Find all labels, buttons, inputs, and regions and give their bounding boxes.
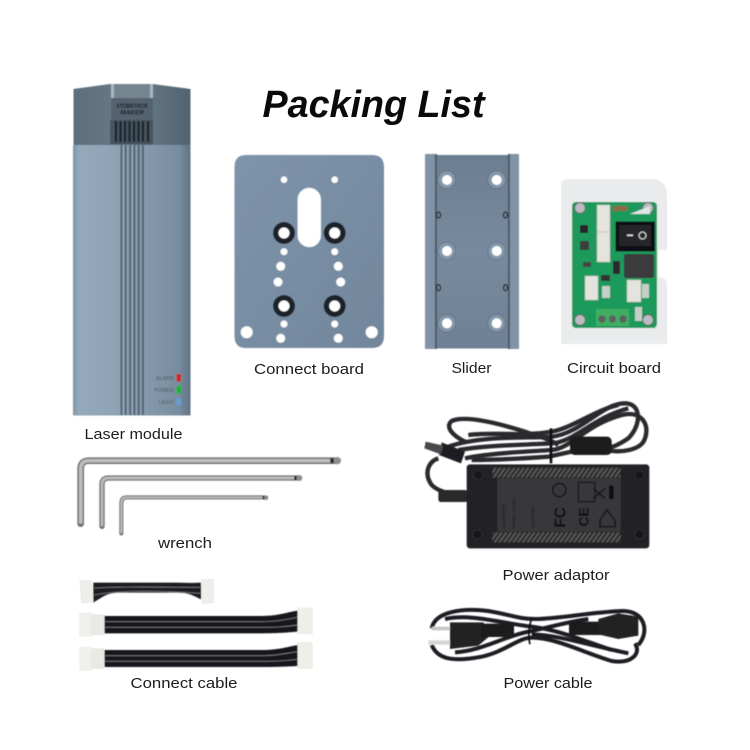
mounting screws xyxy=(574,202,654,326)
head clip with vents: MAKER xyxy=(120,110,144,116)
panel: slider xyxy=(425,154,519,349)
rubber feet xyxy=(473,470,644,539)
head clip with vents: ATOMSTACK xyxy=(115,103,149,110)
module body xyxy=(73,145,190,416)
acrylic base xyxy=(561,179,667,344)
short wrench xyxy=(121,495,268,533)
green pcb xyxy=(572,202,657,328)
caption: laser module: Laser module xyxy=(84,426,182,443)
side rails xyxy=(425,154,519,349)
panel: connect board xyxy=(234,155,384,348)
iec connector xyxy=(569,613,638,639)
status indicators: POWER xyxy=(154,388,174,394)
vent hatching top xyxy=(492,468,621,478)
cable tie xyxy=(547,428,555,463)
panel: connect cables xyxy=(80,579,312,670)
caption: wrench: wrench xyxy=(157,535,212,552)
product label xyxy=(497,478,621,532)
long wrench xyxy=(81,457,341,524)
caption: power cable: Power cable xyxy=(504,675,592,692)
white connectors xyxy=(585,205,641,302)
through holes xyxy=(241,176,378,343)
label printed marks: ADAPTER xyxy=(502,504,508,528)
status indicators xyxy=(154,374,181,406)
caption: power adaptor: Power adaptor xyxy=(502,567,610,584)
panel: laser module xyxy=(73,84,190,416)
coiled dc cord xyxy=(427,403,646,495)
caption: connect cable: Connect cable xyxy=(130,675,238,692)
short cable xyxy=(80,579,213,603)
ferrite bead xyxy=(570,437,612,455)
panel: circuit board xyxy=(561,179,667,344)
label printed marks: CAUTION xyxy=(530,507,535,528)
cord loops xyxy=(432,610,644,662)
us plug xyxy=(428,622,514,649)
rail notches xyxy=(436,212,508,291)
green terminal block xyxy=(596,309,629,326)
cable tie xyxy=(529,618,532,644)
caption: circuit board: Circuit board xyxy=(567,360,661,377)
strain relief xyxy=(438,490,468,502)
medium wrench xyxy=(102,475,302,526)
panel: power adaptor xyxy=(424,403,649,548)
slider holes xyxy=(438,171,506,332)
label printed marks xyxy=(502,482,615,528)
panel: wrench set xyxy=(81,457,341,533)
rocker switch xyxy=(616,222,655,252)
long cable bottom xyxy=(80,643,312,670)
plate with holes xyxy=(234,155,384,348)
head clip with vents xyxy=(110,84,153,144)
status indicators: LIGHT xyxy=(159,400,175,406)
title: Packing List xyxy=(262,84,486,126)
label printed marks: MODEL: 24V 5A xyxy=(511,499,516,528)
status indicators: ALARM xyxy=(156,376,174,382)
label printed marks: FC xyxy=(553,507,570,528)
center ridges xyxy=(120,145,144,415)
caption: slider: Slider xyxy=(452,360,492,377)
slider base xyxy=(425,155,519,348)
countersunk holes xyxy=(273,222,346,317)
dc plug xyxy=(424,442,465,463)
components xyxy=(580,206,654,321)
panel: power cable xyxy=(428,610,644,662)
label printed marks: CE xyxy=(575,507,591,527)
adaptor brick xyxy=(467,464,649,548)
caption: connect board: Connect board xyxy=(254,361,364,378)
long cable top xyxy=(80,608,312,636)
module head xyxy=(74,84,190,145)
vent hatching bottom xyxy=(492,532,621,542)
